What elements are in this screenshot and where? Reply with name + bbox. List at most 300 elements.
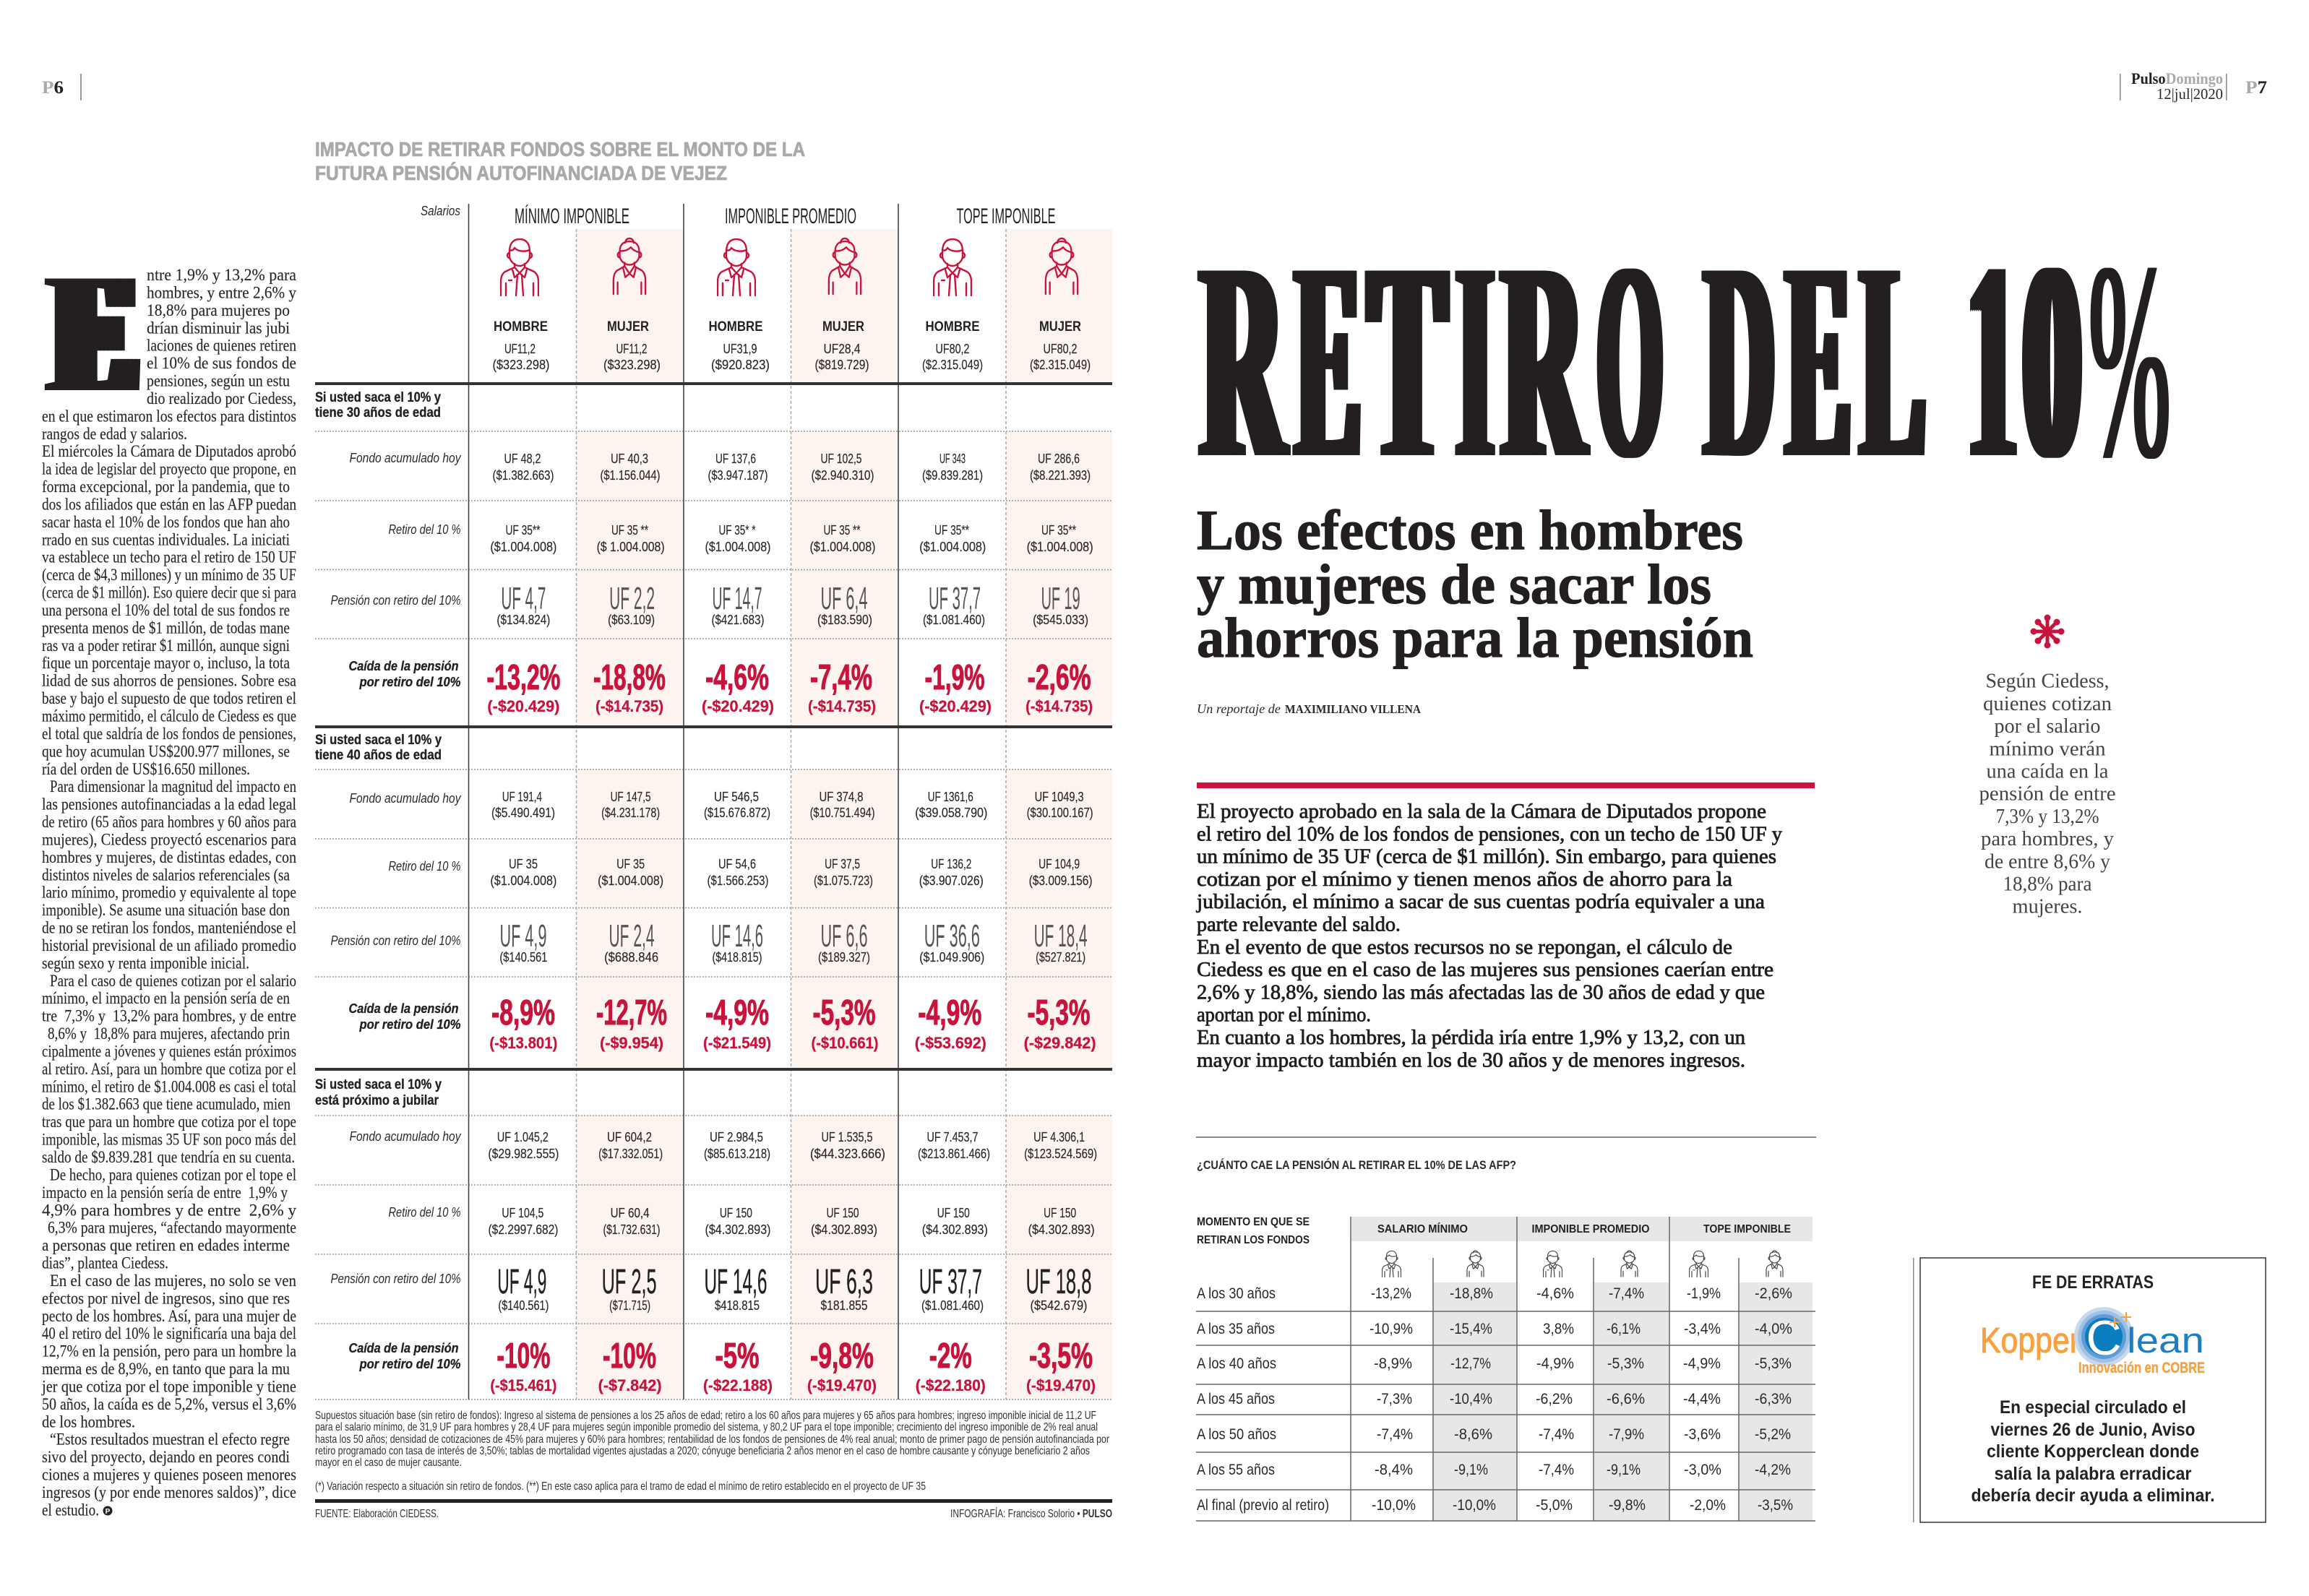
section: próximo a jubilar: $418.815	[715, 1298, 760, 1313]
article body column: una persona el 10% del total de sus fondos re	[42, 601, 290, 619]
section: 30 años: Pensión con retiro del 10%	[331, 593, 461, 608]
section: 40 años: ($1.075.723)	[814, 874, 873, 888]
section: 40 años: ($1.004.008)	[598, 874, 663, 888]
section: 40 años: -8,9%	[491, 993, 555, 1032]
panel: main pension table	[315, 204, 1112, 1399]
article body column: De hecho, para quienes cotizan por el tope el	[50, 1165, 296, 1183]
section: 40 años: ($1.049.906)	[919, 950, 984, 965]
section: 40 años: UF 2,4	[609, 918, 655, 954]
section: próximo a jubilar: (-$15.461)	[490, 1376, 556, 1394]
rows: -7,4%	[1539, 1426, 1574, 1443]
section: 30 años: UF 37,7	[929, 581, 981, 616]
section: 30 años: UF 40,3	[611, 452, 648, 466]
section: 40 años: Retiro del 10 %	[389, 859, 461, 874]
infographic heading: FUTURA PENSIÓN AUTOFINANCIADA DE VEJEZ	[315, 162, 727, 184]
rows: -5,2%	[1755, 1426, 1791, 1443]
text: I	[1452, 204, 1489, 517]
section: próximo a jubilar: ($1.081.460)	[921, 1298, 984, 1313]
section: 30 años: UF 2,2	[609, 581, 655, 616]
section: próximo a jubilar: UF 60,4	[611, 1206, 650, 1220]
section: 40 años: ($3.907.026)	[919, 874, 984, 888]
section: próximo a jubilar: UF 4.306,1	[1033, 1130, 1085, 1144]
infographic heading	[315, 138, 805, 184]
column headers: sex and salary: HOMBRE	[494, 319, 548, 335]
column headers: sex and salary: MUJER	[1039, 319, 1081, 335]
source and credits	[315, 1499, 1112, 1520]
section: 40 años: ($30.100.167)	[1027, 806, 1093, 820]
byline	[1197, 702, 1422, 716]
column group headers	[1197, 1216, 1791, 1246]
article body column: base y bajo el supuesto de que todos retiren el	[42, 689, 296, 707]
rows: -10,0%	[1372, 1497, 1416, 1514]
side note: quienes cotizan	[1983, 692, 2112, 715]
article body column: historial previsional de un afiliado promedio	[42, 936, 296, 954]
section: 30 años: ($63.109)	[608, 613, 655, 627]
section: 30 años: UF 35**	[934, 523, 969, 538]
section: próximo a jubilar: $181.855	[821, 1298, 867, 1313]
article body column: de no se retiran los fondos, manteniéndose el	[42, 919, 296, 936]
lead paragraph: El proyecto aprobado en la sala de la Cámara de Diputados propone	[1197, 801, 1766, 823]
rows: -4,6%	[1536, 1285, 1574, 1302]
section: 40 años: UF 36,6	[924, 918, 980, 954]
rows: A los 50 años	[1197, 1426, 1276, 1443]
section: 40 años: (-$21.549)	[703, 1034, 771, 1052]
lead paragraph: En el evento de que estos recursos no se repongan, el cálculo de	[1197, 936, 1732, 959]
lead paragraph	[1196, 801, 1782, 1071]
subtitle: y mujeres de sacar los	[1197, 553, 1711, 616]
article body column: tras que para un hombre que cotiza por el tope	[42, 1113, 296, 1131]
section: próximo a jubilar: ($85.613.218)	[704, 1147, 770, 1161]
article body column: en el que estimaron los efectos para distintos	[42, 407, 296, 425]
section: 40 años: ($3.009.156)	[1029, 874, 1093, 888]
section: próximo a jubilar: -3,5%	[1029, 1337, 1093, 1376]
page header right: Pulso Domingo P7: P7	[2245, 78, 2267, 98]
erratas text: En especial circulado el	[2000, 1397, 2186, 1418]
side note: 18,8% para	[2003, 873, 2092, 896]
page header right: Pulso Domingo P7: 12|jul|2020	[2157, 85, 2223, 103]
section: 30 años: -13,2%	[486, 658, 560, 697]
article body column: máximo permitido, el cálculo de Ciedess es que	[42, 707, 296, 725]
section: próximo a jubilar: UF 2.984,5	[710, 1130, 763, 1144]
section: próximo a jubilar: ($4.302.893)	[811, 1222, 877, 1237]
rows: A los 40 años	[1197, 1355, 1276, 1372]
article body column: va establece un techo para el retiro de 150 UF	[42, 548, 296, 566]
section: 30 años: UF 35**	[506, 523, 541, 538]
section: próximo a jubilar: Fondo acumulado hoy	[350, 1129, 461, 1144]
section: 30 años: -4,6%	[705, 658, 769, 697]
article body column: pecto de los hombres. Así, para una mujer de	[42, 1307, 296, 1325]
section: próximo a jubilar: -9,8%	[810, 1337, 874, 1376]
article body column: dias”, plantea Ciedess.	[42, 1254, 168, 1272]
panel: second table, drop by age	[1196, 1136, 1816, 1522]
column headers: sex and salary: MUJER	[607, 319, 649, 335]
section: 30 años: UF 343	[939, 452, 966, 466]
section: 30 años: Si usted saca el 10% y	[315, 390, 441, 405]
rows: -9,8%	[1609, 1497, 1646, 1514]
article body column: forma excepcional, por la pandemia, que to	[42, 478, 290, 496]
column group headers: TOPE IMPONIBLE	[1703, 1223, 1791, 1235]
erratas heading: FE DE ERRATAS	[2032, 1272, 2154, 1293]
logo: KopperClean: Innovación en COBRE	[2078, 1360, 2205, 1376]
section: 40 años: Caída de la pensión	[348, 1001, 458, 1016]
column headers: sex and salary: UF80,2	[935, 342, 970, 356]
rows: -2,0%	[1690, 1497, 1726, 1514]
section: 40 años: UF 147,5	[611, 790, 651, 804]
article body column: mínimo, el retiro de $1.004.008 es casi el total	[42, 1077, 296, 1095]
section: 30 años: UF 137,6	[715, 452, 756, 466]
side note: por el salario	[1995, 715, 2100, 738]
text: T	[1363, 204, 1440, 517]
footnotes: (*) Variación respecto a situación sin retiro de fondos. (**) En este caso aplica para el tramo de edad el mínimo de retiro establecido en el proyecto de UF 35	[315, 1480, 926, 1493]
section: 30 años: -18,8%	[593, 658, 666, 697]
section: próximo a jubilar: ($213.861.466)	[918, 1147, 990, 1161]
article body column: que hoy acumulan US$200.977 millones, se	[42, 742, 290, 760]
section: próximo a jubilar: está próximo a jubilar	[315, 1093, 439, 1108]
article body column: merma es de 8,9%, en tanto que para la mu	[42, 1360, 290, 1378]
rows: -3,6%	[1684, 1426, 1721, 1443]
section: 40 años: ($1.566.253)	[707, 874, 769, 888]
section: próximo a jubilar: -10%	[603, 1337, 656, 1376]
article body column: P	[106, 1508, 111, 1516]
section: 40 años: -4,9%	[918, 993, 981, 1032]
section: 40 años	[315, 733, 1096, 1052]
article body column: cipalmente a jóvenes y quienes están próximos	[42, 1042, 296, 1061]
rows: -7,9%	[1609, 1426, 1644, 1443]
column headers: sex and salary: UF28,4	[824, 342, 860, 356]
article body column: tre 7,3% y 13,2% para hombres, y de entre	[42, 1007, 296, 1025]
icon: red asterisk	[2031, 614, 2064, 649]
article body column: presenta menos de $1 millón, de todas mane	[42, 618, 290, 637]
section: 40 años: UF 191,4	[502, 790, 542, 804]
section: 40 años: Si usted saca el 10% y	[315, 733, 442, 748]
rows: -9,1%	[1454, 1462, 1488, 1478]
lead paragraph: mayor impacto también en los de 30 años y de menores ingresos.	[1197, 1049, 1745, 1071]
logo: KopperClean	[1980, 1307, 2205, 1376]
section: próximo a jubilar: Caída de la pensión	[348, 1341, 458, 1355]
section: 40 años: ($5.490.491)	[491, 806, 555, 820]
side note: una caída en la	[1986, 760, 2109, 783]
rows: A los 30 años	[1197, 1285, 1276, 1302]
rows: -4,9%	[1683, 1355, 1721, 1372]
section: 30 años: ($1.004.008)	[919, 540, 986, 554]
article body column: drían disminuir las jubi	[147, 319, 290, 337]
section: 30 años: Caída de la pensión	[348, 659, 458, 673]
article body column: ría del orden de US$16.650 millones.	[42, 760, 250, 778]
section: próximo a jubilar: ($1.732.631)	[603, 1222, 661, 1237]
article body column: de los hombres.	[42, 1412, 135, 1431]
section: 30 años: ($1.004.008)	[705, 540, 770, 554]
side note: pensión de entre	[1979, 782, 2116, 806]
section: próximo a jubilar	[315, 1077, 1097, 1394]
section: 30 años: -7,4%	[810, 658, 872, 697]
rows: -3,0%	[1684, 1462, 1721, 1478]
rows: -5,3%	[1607, 1355, 1644, 1372]
article body column: rangos de edad y salarios.	[42, 425, 187, 443]
rows: -8,4%	[1375, 1462, 1413, 1478]
section: 40 años: UF 35	[616, 857, 645, 871]
section: 40 años: -5,3%	[812, 993, 876, 1032]
article body column: ingresos (y por ende menores saldos)”, dice	[42, 1483, 296, 1501]
section: 30 años: (-$20.429)	[487, 697, 559, 715]
erratas text: viernes 26 de Junio, Aviso	[1990, 1420, 2196, 1440]
rows	[1197, 1285, 1793, 1514]
section: 30 años	[315, 390, 1093, 715]
article body column: ntre 1,9% y 13,2% para	[147, 266, 296, 284]
article body column: de los $1.382.663 que tiene acumulado, mien	[42, 1095, 291, 1113]
text: E	[1781, 204, 1846, 517]
section: próximo a jubilar: ($123.524.569)	[1024, 1147, 1097, 1161]
section: 40 años: UF 35	[509, 857, 538, 871]
article body column: 4,9% para hombres y de entre 2,6% y	[42, 1201, 296, 1219]
text: R	[1497, 204, 1578, 517]
section: próximo a jubilar: UF 18,8	[1026, 1263, 1091, 1301]
section: 30 años: UF 35* *	[718, 523, 756, 538]
rows: -2,6%	[1755, 1285, 1792, 1302]
rows: -4,4%	[1683, 1391, 1721, 1407]
article body column: mujeres), Ciedess proyectó escenarios para	[42, 830, 296, 848]
rows: -8,9%	[1374, 1355, 1412, 1372]
section: 30 años: -2,6%	[1028, 658, 1091, 697]
column headers: sex and salary: ($819.729)	[815, 358, 869, 372]
section: 30 años: (-$20.429)	[702, 697, 774, 715]
article body column: mínimo, el impacto en la pensión sería de en	[42, 989, 290, 1007]
source and credits: INFOGRAFÍA: Francisco Solorio • PULSO	[950, 1506, 1112, 1520]
section: 30 años: (-$14.735)	[595, 697, 663, 715]
section: 30 años: ($1.004.008)	[809, 540, 876, 554]
section: 40 años: (-$9.954)	[600, 1034, 663, 1052]
article body column: a personas que retiren en edades interme	[42, 1236, 290, 1254]
lead paragraph: un mínimo de 35 UF (cerca de $1 millón). Sin embargo, para quienes	[1197, 846, 1776, 868]
column headers: sex and salary: ($2.315.049)	[1030, 358, 1091, 372]
article body column: rrado en sus cuentas individuales. La iniciati	[42, 530, 290, 548]
article body column: Para dimensionar la magnitud del impacto en	[50, 777, 296, 795]
section: 30 años: UF 35**	[1041, 523, 1076, 538]
article body column: hombres y mujeres, de distintas edades, con	[42, 848, 296, 866]
article body column: al retiro. Así, para un hombre que cotiza por el	[42, 1060, 296, 1078]
erratas text: debería decir ayuda a eliminar.	[1972, 1485, 2214, 1506]
article body column: de retiro (65 años para hombres y 60 años para	[42, 813, 296, 831]
rows: -3,4%	[1684, 1321, 1721, 1337]
section: 40 años: UF 6,6	[821, 918, 867, 954]
section: 40 años: ($10.751.494)	[810, 806, 875, 820]
rows: -5,3%	[1755, 1355, 1792, 1372]
rows: -8,6%	[1454, 1426, 1492, 1443]
column headers: sex and salary: UF80,2	[1044, 342, 1077, 356]
rows: -5,0%	[1536, 1497, 1573, 1514]
salary group headers: TOPE IMPONIBLE	[957, 204, 1055, 228]
section: 40 años: ($688.846	[604, 950, 658, 965]
section: 40 años: UF 374,8	[820, 790, 863, 804]
section: 30 años: ($421.683)	[711, 613, 765, 627]
section: próximo a jubilar: ($542.679)	[1031, 1298, 1087, 1313]
salary group headers	[421, 204, 1055, 228]
article body column: pensiones, según un estu	[147, 371, 290, 390]
rows: Al final (previo al retiro)	[1197, 1497, 1329, 1514]
section: 30 años: (-$20.429)	[919, 697, 992, 715]
section: próximo a jubilar: UF 150	[1044, 1206, 1076, 1220]
section: 30 años: UF 286,6	[1038, 452, 1080, 466]
drop cap E: E	[43, 239, 122, 428]
article body column: ras va a poder retirar $1 millón, aunque signi	[42, 637, 290, 655]
section: 40 años: UF 14,6	[711, 918, 763, 954]
section: 30 años: UF 4,7	[501, 581, 546, 616]
section: 40 años: por retiro del 10%	[359, 1017, 461, 1032]
section: próximo a jubilar: ($44.323.666)	[810, 1147, 885, 1161]
section: 40 años: ($527.821)	[1036, 950, 1085, 965]
section: 30 años: -1,9%	[925, 658, 984, 697]
logo: KopperClean: lean	[2127, 1321, 2204, 1360]
section: próximo a jubilar: Si usted saca el 10% y	[315, 1077, 442, 1092]
section: próximo a jubilar: UF 604,2	[607, 1130, 652, 1144]
section: 30 años: ($ 1.004.008)	[597, 540, 665, 554]
title: RETIRO DEL 10%	[1195, 204, 2169, 517]
footnotes: mayor en el caso de mujer causante.	[315, 1457, 462, 1469]
article body column: distintos niveles de salarios referenciales (sa	[42, 866, 290, 884]
section: próximo a jubilar: UF 104,5	[502, 1206, 543, 1220]
subtitle	[1197, 499, 1753, 669]
page header left: P6: P6	[42, 78, 64, 98]
section: 30 años: ($3.947.187)	[708, 468, 767, 483]
section: próximo a jubilar: ($71.715)	[609, 1298, 650, 1313]
footnotes	[315, 1410, 1110, 1493]
section: 40 años: (-$13.801)	[489, 1034, 557, 1052]
side note: 7,3% y 13,2%	[1996, 805, 2099, 828]
article body column: ciones a mujeres y quienes poseen menores	[42, 1466, 296, 1484]
section: 40 años: UF 136,2	[931, 857, 971, 871]
article body column: lidad de sus ahorros de pensiones. Sobre esa	[42, 672, 296, 690]
section: próximo a jubilar: ($29.982.555)	[488, 1147, 559, 1161]
side note: mujeres.	[2012, 895, 2083, 918]
section: próximo a jubilar: ($4.302.893)	[922, 1222, 988, 1237]
side note: para hombres, y	[1981, 827, 2114, 850]
section: próximo a jubilar: ($140.561)	[498, 1298, 549, 1313]
article body column: imponible, las mismas 35 UF son poco más del	[42, 1131, 296, 1149]
section: 30 años: Fondo acumulado hoy	[350, 451, 461, 465]
section: 30 años: UF 102,5	[821, 452, 861, 466]
lead paragraph: Ciedess es que en el caso de las mujeres sus pensiones caerían entre	[1197, 959, 1773, 981]
section: 30 años: ($1.004.008)	[490, 540, 556, 554]
section: 40 años: UF 104,9	[1039, 857, 1080, 871]
rows: 3,8%	[1543, 1321, 1574, 1337]
rows: -10,0%	[1453, 1497, 1496, 1514]
column headers: sex and salary: ($323.298)	[493, 358, 549, 372]
article body column: lario mínimo, promedio y equivalente al tope	[42, 884, 296, 902]
footnotes: Supuestos situación base (sin retiro de fondos): Ingreso al sistema de pensiones a los 25 años de edad; retiro a los 60 años para mujeres y 65 años para hombres; ingreso imponible inicial de 11,2 UF	[315, 1410, 1096, 1422]
article body column: el total que saldría de los fondos de pensiones,	[42, 725, 296, 743]
rows: -10,9%	[1370, 1321, 1413, 1337]
section: 30 años: (-$14.735)	[808, 697, 876, 715]
rows: -6,6%	[1607, 1391, 1645, 1407]
section: 30 años: UF 35 **	[611, 523, 648, 538]
text: R	[1195, 204, 1278, 517]
section: 30 años: UF 6,4	[821, 581, 867, 616]
article body column: imponible). Se asume una situación base don	[42, 901, 290, 919]
icons: men and women, red	[501, 238, 1078, 296]
text: 0	[2018, 204, 2075, 517]
lead paragraph: parte relevante del saldo.	[1197, 913, 1401, 936]
section: próximo a jubilar: ($4.302.893)	[1028, 1222, 1095, 1237]
section: 40 años: -12,7%	[596, 993, 667, 1032]
page header left: P6	[42, 74, 82, 100]
section: 40 años: UF 37,5	[825, 857, 860, 871]
section: próximo a jubilar: UF 150	[720, 1206, 752, 1220]
salary group headers: Salarios	[421, 204, 460, 218]
footnotes: retiro programado con tasa de interés de 3,50%; tablas de mortalidad vigentes ajustadas a 2020; cónyuge beneficiaria 2 años menor en el caso de hombre causante y cónyuge beneficiario 2 años	[315, 1445, 1090, 1457]
section: próximo a jubilar: UF 4,9	[497, 1263, 546, 1301]
section: 40 años: (-$10.661)	[811, 1034, 879, 1052]
section: 40 años: ($140.561	[499, 950, 547, 965]
section: próximo a jubilar: ($2.2997.682)	[489, 1222, 558, 1237]
article body column: (cerca de $4,3 millones) y un mínimo de 35 UF	[42, 566, 296, 584]
article body column: las pensiones autofinanciadas a la edad legal	[42, 795, 296, 814]
section: próximo a jubilar: (-$22.180)	[916, 1376, 986, 1394]
article body column: El miércoles la Cámara de Diputados aprobó	[42, 442, 296, 460]
page header right: Pulso Domingo P7: PulsoDomingo	[2131, 69, 2223, 87]
section: 40 años: UF 54,6	[718, 857, 756, 871]
rows: A los 55 años	[1197, 1462, 1275, 1478]
article body column: jer que cotiza por el tope imponible y tiene	[41, 1377, 296, 1396]
section: próximo a jubilar: por retiro del 10%	[359, 1357, 461, 1371]
section: próximo a jubilar: -10%	[496, 1337, 550, 1376]
column group headers: IMPONIBLE PROMEDIO	[1532, 1223, 1649, 1235]
column headers: sex and salary: HOMBRE	[708, 319, 763, 335]
footnotes: para el salario mínimo, de 31,9 UF para hombres y 28,4 UF para mujeres según imponible promedio del sistema, y 80,2 UF para el tope imponible; crecimiento del ingreso imponible de 2% real anual	[315, 1421, 1098, 1433]
article body column: 18,8% para mujeres po	[147, 301, 290, 319]
section: 30 años: UF 48,2	[504, 452, 541, 466]
section: 30 años: ($1.156.044)	[600, 468, 661, 483]
lead paragraph: 2,6% y 18,8%, siendo las más afectadas las de 30 años de edad y que	[1197, 981, 1765, 1004]
section: próximo a jubilar: (-$7.842)	[598, 1376, 662, 1394]
section: próximo a jubilar: Pensión con retiro del 10%	[331, 1272, 461, 1286]
panel: fe de erratas	[1913, 1258, 2266, 1522]
rows: A los 35 años	[1197, 1321, 1275, 1337]
section: próximo a jubilar: UF 6,3	[815, 1263, 873, 1301]
rows: -4,2%	[1755, 1462, 1791, 1478]
section: 30 años: ($1.004.008)	[1027, 540, 1093, 554]
section: 30 años: ($545.033)	[1033, 613, 1088, 627]
article body column: En el caso de las mujeres, no solo se ven	[50, 1272, 296, 1290]
section: próximo a jubilar: UF 7.453,7	[926, 1130, 979, 1144]
section: 30 años: ($8.221.393)	[1030, 468, 1091, 483]
lead paragraph: En cuanto a los hombres, la pérdida iría entre 1,9% y 13,2, con un	[1197, 1027, 1745, 1049]
section: 30 años: por retiro del 10%	[359, 675, 461, 689]
column headers: sex and salary: UF31,9	[723, 342, 757, 356]
section: 30 años: ($1.081.460)	[923, 613, 985, 627]
side note: mínimo verán	[1989, 737, 2106, 760]
section: 30 años: UF 19	[1041, 581, 1080, 616]
article body column: (cerca de $1 millón). Eso quiere decir que si para	[42, 584, 296, 602]
section: próximo a jubilar: (-$19.470)	[807, 1376, 877, 1394]
section: próximo a jubilar: UF 2,5	[602, 1263, 657, 1301]
rows: -4,9%	[1536, 1355, 1574, 1372]
section: 40 años: ($4.231.178)	[601, 806, 660, 820]
section: próximo a jubilar: Retiro del 10 %	[389, 1205, 461, 1220]
section: próximo a jubilar: -2%	[929, 1337, 972, 1376]
article body column: la idea de legislar del proyecto que propone, en	[42, 460, 296, 478]
logo: KopperClean: C	[2086, 1311, 2122, 1366]
section: 40 años: UF 4,9	[500, 918, 546, 954]
rows: -18,8%	[1450, 1285, 1493, 1302]
rows: -6,3%	[1755, 1391, 1792, 1407]
column headers: sex and salary: UF11,2	[616, 342, 648, 356]
section: 40 años: tiene 40 años de edad	[315, 748, 442, 763]
article body column: el 10% de sus fondos de	[147, 354, 296, 372]
article body column	[41, 266, 296, 1519]
rows: -1,9%	[1687, 1285, 1721, 1302]
section: próximo a jubilar: UF 150	[827, 1206, 859, 1220]
column group headers: MOMENTO EN QUE SE	[1197, 1216, 1310, 1228]
section: 40 años: Pensión con retiro del 10%	[331, 933, 461, 948]
